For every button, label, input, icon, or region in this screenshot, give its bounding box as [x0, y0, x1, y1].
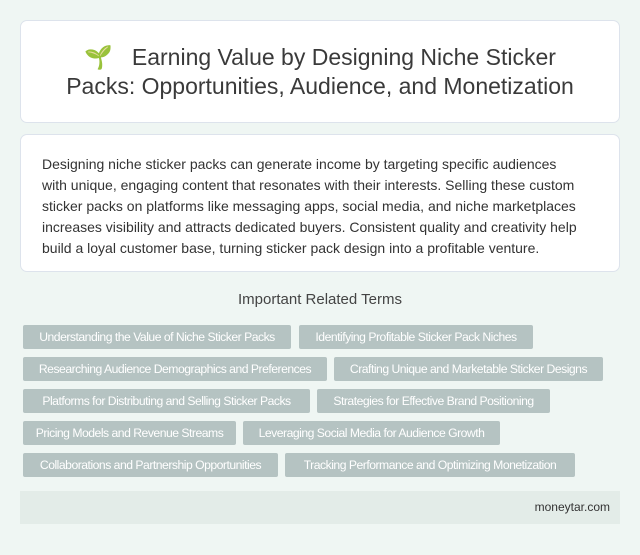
title: Packs: Opportunities, Audience, and Monetization [66, 73, 574, 99]
tag [285, 453, 575, 477]
description text: increases visibility and attracts dedicated buyers. Consistent quality and creativity help [42, 219, 577, 235]
tag: Leveraging Social Media for Audience Growth [259, 426, 484, 440]
title [66, 44, 574, 99]
description text: Designing niche sticker packs can generate income by targeting specific audiences [42, 156, 556, 172]
tag [334, 357, 603, 381]
tag [23, 325, 291, 349]
title: 🌱 Earning Value by Designing Niche Sticker [84, 44, 556, 70]
description text: with unique, engaging content that resonates with their interests. Selling these custom [42, 177, 574, 193]
tag [317, 389, 550, 413]
footer [20, 491, 620, 524]
tag: Identifying Profitable Sticker Pack Niches [315, 330, 517, 344]
section heading: Important Related Terms [238, 291, 402, 308]
description text: sticker packs on platforms like messaging apps, social media, and niche marketplaces [42, 198, 576, 214]
tag: Platforms for Distributing and Selling Sticker Packs [42, 394, 291, 408]
footer source: moneytar.com [535, 500, 610, 514]
title card [20, 20, 620, 123]
tag [23, 421, 236, 445]
tag [23, 453, 278, 477]
tag: Strategies for Effective Brand Positioning [333, 394, 534, 408]
tag: Understanding the Value of Niche Sticker Packs [39, 330, 275, 344]
tag [299, 325, 533, 349]
tag [23, 357, 327, 381]
tag: Pricing Models and Revenue Streams [36, 426, 223, 440]
tag: Tracking Performance and Optimizing Monetization [304, 458, 556, 472]
tag [23, 389, 310, 413]
description text: build a loyal customer base, turning sticker pack design into a profitable venture. [42, 240, 539, 256]
description text [42, 156, 577, 256]
tag: Researching Audience Demographics and Preferences [39, 362, 311, 376]
description card [20, 134, 620, 272]
tag: Crafting Unique and Marketable Sticker Designs [350, 362, 587, 376]
tag [243, 421, 500, 445]
tag: Collaborations and Partnership Opportunities [40, 458, 261, 472]
